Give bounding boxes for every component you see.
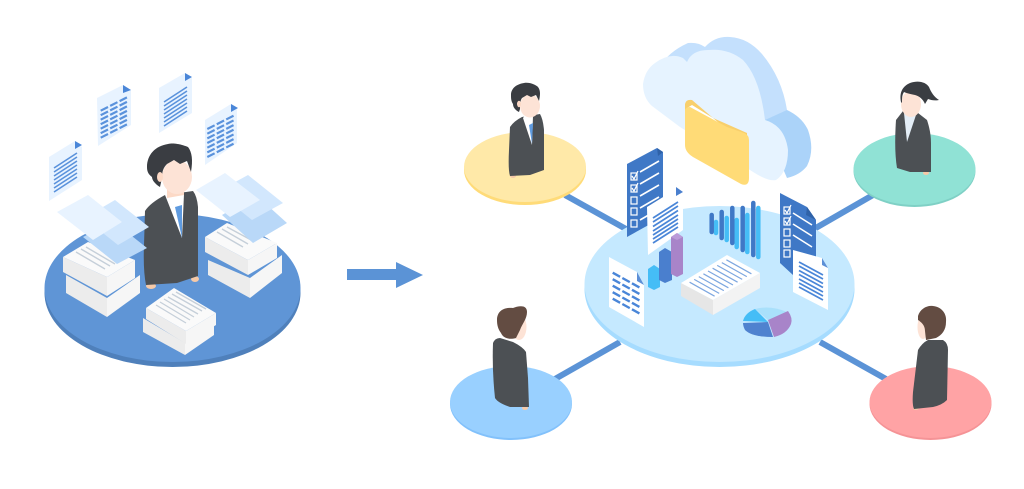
floating loose sheets right (196, 173, 287, 243)
table document on hub (609, 257, 644, 327)
cloud storage (643, 37, 811, 180)
person seen from behind (913, 306, 948, 410)
paper stack front (143, 288, 216, 355)
central paper block (681, 255, 760, 315)
connector lines between hub and people (555, 195, 886, 379)
white document right (793, 250, 828, 310)
floating document 3 (159, 73, 192, 133)
isometric column chart (712, 203, 758, 257)
floating loose sheets left (57, 195, 149, 264)
paper stack right (205, 223, 282, 298)
3D bar chart (648, 233, 683, 290)
white document on hub (647, 187, 683, 255)
satellite: blue disc person bottom left (450, 306, 572, 440)
pie chart (743, 308, 792, 337)
blue platform disc (44, 214, 300, 367)
central hub disc (584, 206, 854, 367)
floating document 1 (49, 141, 82, 201)
floating document 2 (97, 85, 131, 146)
satellite: pink disc person bottom right (870, 306, 992, 440)
satellite: yellow disc person top left (464, 83, 586, 205)
person seen from behind (493, 306, 529, 410)
blue checklist right (780, 193, 816, 285)
person with blue tie (144, 143, 199, 289)
yellow folder (685, 100, 749, 185)
paper stack left (63, 242, 140, 317)
woman with ponytail (895, 82, 939, 175)
floating document 4 (205, 104, 238, 165)
left scene: one worker with paper stacks (44, 73, 300, 367)
arrow pointing right (347, 262, 423, 288)
blue checklist left (627, 148, 663, 237)
satellite: teal disc woman top right (854, 82, 976, 207)
person with tie (509, 83, 544, 178)
